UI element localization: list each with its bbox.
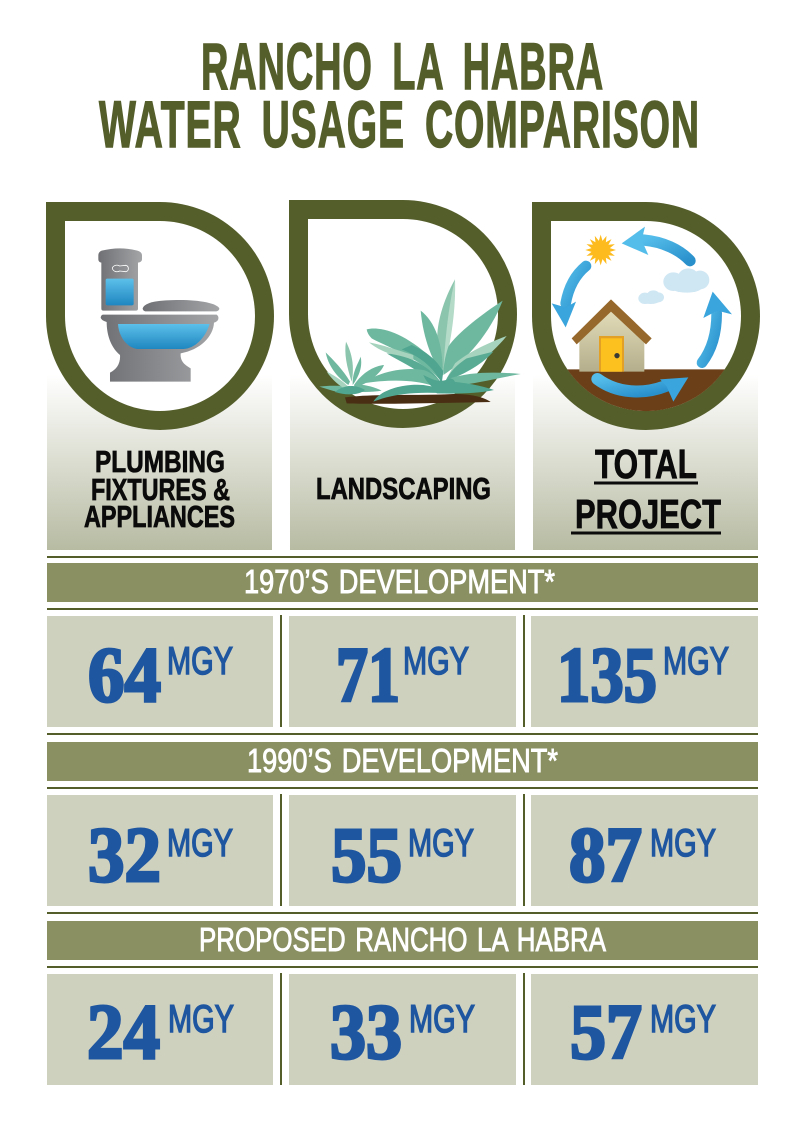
section: 1990's development xyxy=(47,742,758,781)
row: proposed values xyxy=(47,974,758,1085)
label: plumbing: PLUMBING xyxy=(95,444,225,479)
row: 1970's values: MGY xyxy=(663,640,729,683)
row: 1990's values: MGY xyxy=(650,822,716,865)
row: 1990's values: 87 xyxy=(569,811,642,898)
icon: toilet xyxy=(98,248,219,382)
row: proposed values: MGY xyxy=(650,998,716,1041)
row: proposed values: 24 xyxy=(87,988,160,1075)
row: proposed values: MGY xyxy=(409,998,475,1041)
label: total project: TOTAL xyxy=(595,441,697,487)
label: plumbing: FIXTURES & xyxy=(91,472,230,507)
row: proposed values: 33 xyxy=(330,988,402,1075)
row: 1970's values: 135 xyxy=(557,631,657,718)
label: plumbing: APPLIANCES xyxy=(84,499,235,534)
label: total project: PROJECT xyxy=(575,491,721,537)
section: 1970's development xyxy=(47,563,758,602)
row: 1990's values: 32 xyxy=(88,811,161,898)
section: proposed Rancho La Habra xyxy=(47,921,758,960)
row: 1990's values: 55 xyxy=(331,811,402,898)
panel: plumbing fixtures and appliances xyxy=(46,202,274,550)
row: 1970's values: MGY xyxy=(403,640,469,683)
row: proposed values: MGY xyxy=(168,998,234,1041)
panel: total project xyxy=(532,202,760,550)
row: 1970's values: 71 xyxy=(336,631,400,718)
row: 1970's values: MGY xyxy=(167,640,233,683)
row: 1990's values: MGY xyxy=(408,822,474,865)
label: plumbing xyxy=(84,444,235,534)
icon: agave plants xyxy=(319,279,521,404)
label: landscaping: LANDSCAPING xyxy=(316,471,491,506)
title xyxy=(99,29,700,161)
label: total project xyxy=(571,441,721,537)
section: proposed Rancho La Habra: PROPOSED RANCHO LA HABRA xyxy=(199,921,606,958)
icon: water cycle with house xyxy=(552,227,732,411)
section: 1990's development: 1990’S DEVELOPMENT* xyxy=(247,742,558,779)
section: 1970's development: 1970’S DEVELOPMENT* xyxy=(244,563,555,600)
row: 1990's values xyxy=(47,795,758,906)
row: 1990's values: MGY xyxy=(167,822,233,865)
row: proposed values: 57 xyxy=(570,988,642,1075)
row: 1970's values xyxy=(47,616,758,727)
panel: landscaping xyxy=(289,200,521,550)
row: 1970's values: 64 xyxy=(88,631,161,718)
